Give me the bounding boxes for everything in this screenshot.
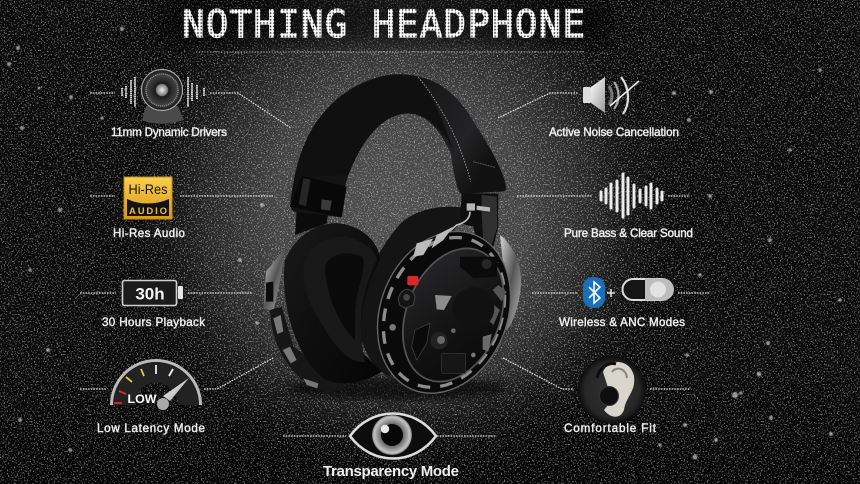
right earcup transparent body xyxy=(354,211,534,413)
feature: Pure Bass & Clear Sound xyxy=(564,174,693,240)
icon: battery: 30h xyxy=(135,284,165,304)
feature: Transparency Mode xyxy=(323,414,459,480)
right yoke xyxy=(440,193,498,247)
feature: Hi-Res Audio xyxy=(113,177,185,240)
icon: Hi-Res badge: AUDIO xyxy=(129,206,167,217)
icon: sound waveform xyxy=(601,174,662,217)
feature: Low Latency Mode xyxy=(97,359,205,435)
feature: 11mm Dynamic Drivers: 11mm Dynamic Drivers xyxy=(111,126,227,139)
icon: Hi-Res badge xyxy=(124,177,172,219)
feature: Comfortable Fit xyxy=(564,356,657,435)
feature: Wireless & ANC Modes xyxy=(559,277,685,329)
feature: Comfortable Fit: Comfortable Fit xyxy=(564,422,657,435)
icon: bluetooth plus toggle xyxy=(583,277,674,308)
feature: Active Noise Cancellation: Active Noise Cancellation xyxy=(549,126,679,139)
feature: Active Noise Cancellation xyxy=(549,77,679,139)
icon: Hi-Res badge: Hi-Res xyxy=(128,181,168,197)
title: NOTHING HEADPHONE xyxy=(182,2,585,46)
connector lines xyxy=(80,93,710,436)
feature: Wireless & ANC Modes: Wireless & ANC Modes xyxy=(559,316,685,329)
left ear pad xyxy=(284,223,382,383)
headband xyxy=(290,74,507,217)
feature: 11mm Dynamic Drivers xyxy=(111,70,227,139)
feature: Low Latency Mode: Low Latency Mode xyxy=(97,422,205,435)
icon: eye xyxy=(350,414,436,458)
feature: Transparency Mode: Transparency Mode xyxy=(323,463,459,480)
feature: 30 Hours Playback: 30 Hours Playback xyxy=(102,316,205,329)
right ear cushion back xyxy=(358,207,462,377)
left earcup shell xyxy=(263,248,347,393)
feature: Pure Bass & Clear Sound: Pure Bass & Clear Sound xyxy=(564,227,693,240)
icon: ear with earbud xyxy=(578,356,646,424)
icon: speaker with muted waves xyxy=(583,77,639,114)
feature: Hi-Res Audio: Hi-Res Audio xyxy=(113,227,185,240)
feature: 30 Hours Playback xyxy=(102,280,205,329)
headphones illustration xyxy=(263,74,534,413)
icon: speaker driver xyxy=(122,70,204,124)
left yoke xyxy=(295,210,328,235)
icon: speedometer: LOW xyxy=(128,394,157,406)
